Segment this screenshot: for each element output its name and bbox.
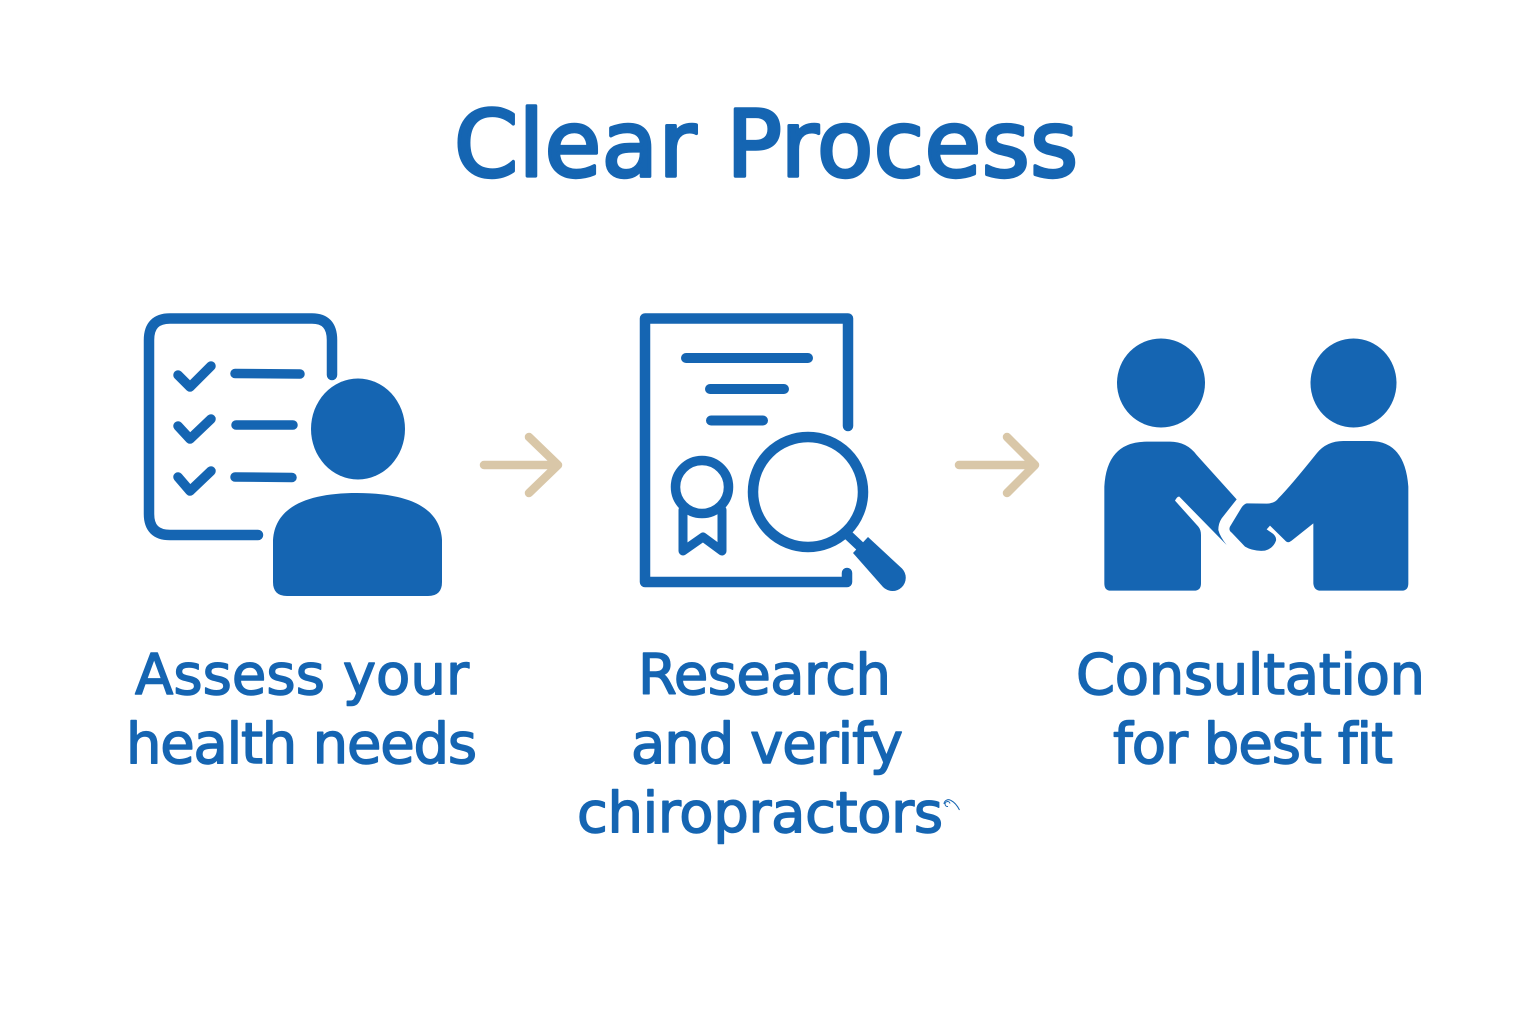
arrow: step 1 to step 2 [484,437,558,493]
panel: step 1 assess [126,318,477,777]
seal ribbon [683,510,722,551]
small swirl mark [944,800,960,810]
title: Clear Process [454,91,1078,198]
panel: step 2 research [577,318,960,846]
checklist outline [149,318,332,535]
magnifier handle grip [853,537,906,591]
icon: certificate and magnifier [645,318,906,591]
right person body and clasped hand [1229,441,1408,591]
certificate seal [676,460,728,514]
checklist lines [235,374,300,478]
document lines [686,358,808,420]
label: consultation for best fit: for best fit [1113,712,1393,777]
panel: step 3 consultation [1076,338,1425,777]
right person head [1310,338,1396,428]
left person body [1104,442,1237,591]
document outline [645,318,848,582]
label: consultation for best fit [1076,643,1425,777]
label: research and verify chiropractors: Research [638,643,891,708]
person head [311,378,405,480]
label: research and verify chiropractors: and verify [631,712,903,777]
label: research and verify chiropractors: chiropractors [577,781,943,846]
label: assess your health needs: health needs [126,712,477,777]
arrow: step 2 to step 3 [959,437,1035,493]
magnifier lens [753,437,863,547]
person body [273,493,442,596]
icon: two people shaking hands [1104,338,1408,591]
magnifier handle neck [847,534,864,550]
check marks [178,366,211,491]
label: assess your health needs [126,643,477,777]
label: consultation for best fit: Consultation [1076,643,1425,708]
icon: checklist with person [149,318,442,596]
left person head [1117,338,1205,428]
label: research and verify chiropractors [577,643,943,846]
label: assess your health needs: Assess your [135,643,470,708]
